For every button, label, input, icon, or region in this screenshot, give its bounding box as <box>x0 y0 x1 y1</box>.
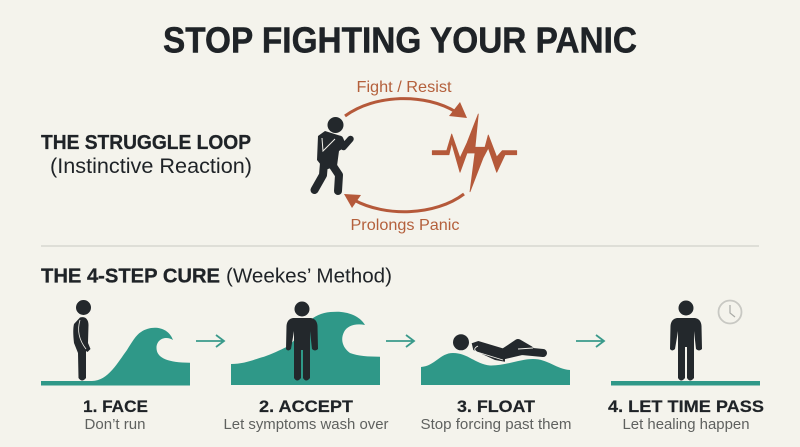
label: 1. face: 1. FACE <box>83 397 148 416</box>
label: fight / resist: Fight / Resist <box>356 79 452 96</box>
step 3: float <box>420 334 572 433</box>
title: STOP FIGHTING YOUR PANIC <box>163 20 637 61</box>
icon: wave washing over <box>231 312 380 385</box>
step 1: face <box>41 300 190 433</box>
icon: ground line <box>611 381 760 386</box>
arrow: step 3 to 4 <box>576 335 604 347</box>
step 4: let time pass <box>608 300 764 433</box>
caption: stop forcing past them: Stop forcing past them <box>420 416 572 433</box>
arrow: step 2 to 3 <box>386 335 414 347</box>
caption: let symptoms wash over: Let symptoms wash over <box>224 416 388 433</box>
label: 4. let time pass: 4. LET TIME PASS <box>608 397 764 416</box>
icon: standing figure <box>670 300 702 380</box>
heading: the struggle loop: (Instinctive Reaction) <box>50 155 252 178</box>
icon: clock <box>718 300 742 324</box>
heading: the 4-step cure: (Weekes’ Method) <box>226 266 392 288</box>
heading: the struggle loop <box>41 132 252 178</box>
arrow: fight to panic <box>345 99 467 118</box>
label: 3. float: 3. FLOAT <box>457 397 536 416</box>
icon: standing figure <box>286 302 318 380</box>
icon: floating figure <box>453 334 543 362</box>
heading: the struggle loop: THE STRUGGLE LOOP <box>41 132 251 154</box>
step 2: accept <box>224 302 388 433</box>
icon: panic jagged pulse <box>432 114 517 192</box>
arrow: panic back to fighter <box>344 194 464 212</box>
arrow: step 1 to 2 <box>196 335 224 347</box>
caption: let healing happen: Let healing happen <box>622 416 750 433</box>
caption: don't run: Don’t run <box>84 416 146 433</box>
icon: fighting figure <box>314 117 350 191</box>
label: prolongs panic: Prolongs Panic <box>350 217 460 234</box>
icon: standing figure in profile <box>73 300 91 380</box>
icon: wave approaching <box>41 328 190 386</box>
heading: the 4-step cure <box>41 266 392 288</box>
icon: gentle swell <box>421 353 570 385</box>
heading: the 4-step cure: THE 4-STEP CURE <box>41 266 220 288</box>
label: 2. accept: 2. ACCEPT <box>259 397 354 416</box>
